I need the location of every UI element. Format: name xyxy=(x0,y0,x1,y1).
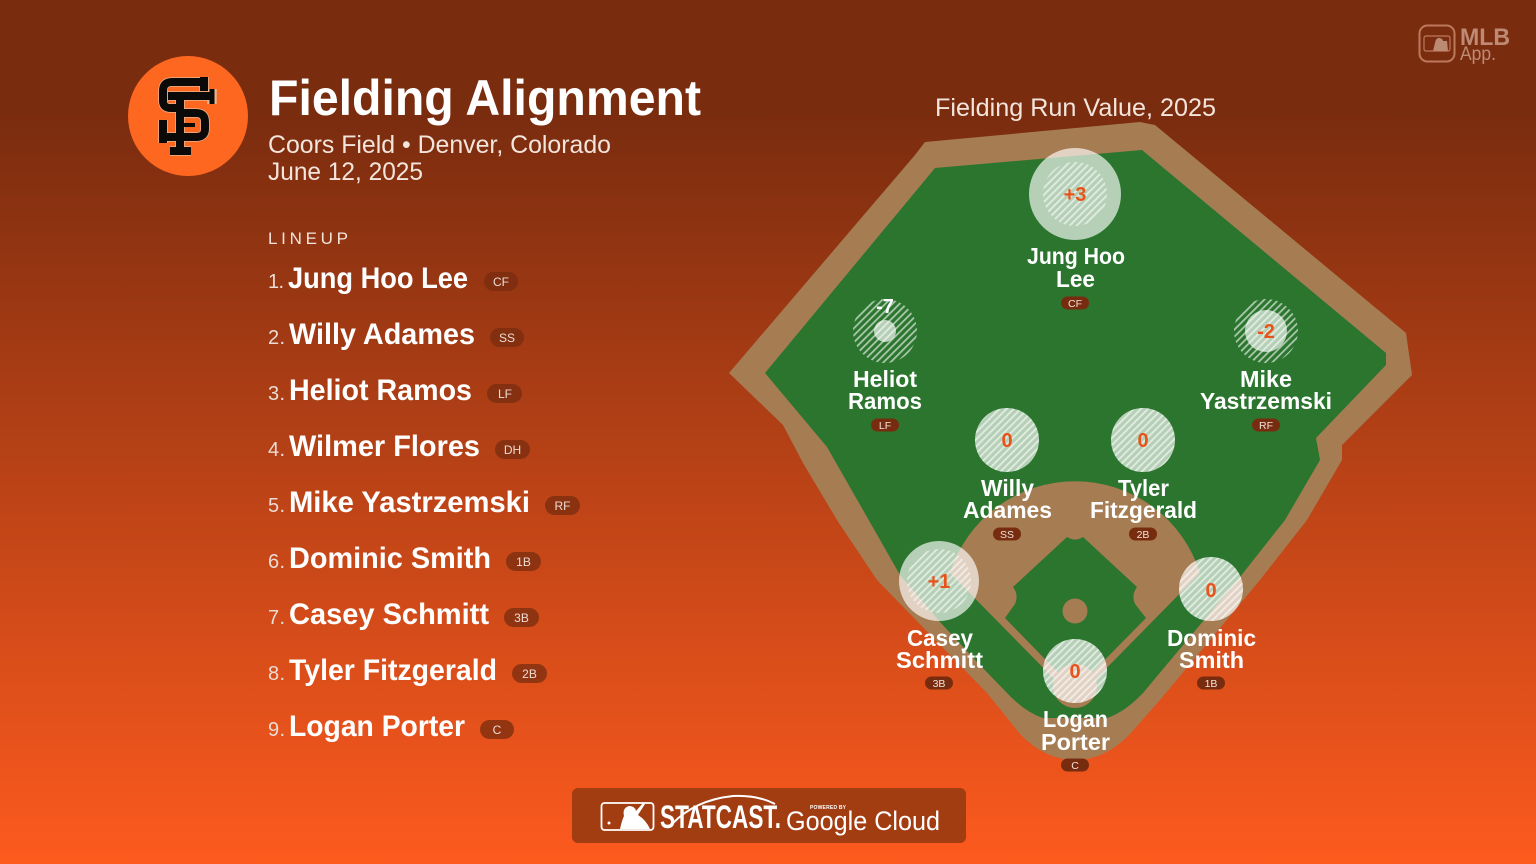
team logo: San Francisco Giants xyxy=(128,56,248,176)
warning track xyxy=(729,122,1412,760)
player: Tyler Fitzgerald: 0 xyxy=(1137,430,1149,452)
lineup row 7: Casey Schmitt xyxy=(289,598,489,631)
player: Mike Yastrzemski: Mike xyxy=(1240,366,1292,392)
player: Willy Adames xyxy=(963,408,1052,541)
lineup row 1: CF xyxy=(493,275,509,289)
powered by label: POWERED BY xyxy=(810,805,847,811)
player: Logan Porter: Logan xyxy=(1043,706,1108,732)
lineup row 1: Jung Hoo Lee xyxy=(288,262,468,295)
player: Mike Yastrzemski: -2 xyxy=(1257,321,1275,343)
player: Heliot Ramos: -7 xyxy=(876,296,894,318)
player: Logan Porter: 0 xyxy=(1069,661,1081,683)
lineup row 4: Wilmer Flores xyxy=(289,430,480,463)
lineup row 6: Dominic Smith xyxy=(289,542,491,575)
player: Logan Porter xyxy=(1041,639,1110,772)
player: Dominic Smith: Smith xyxy=(1179,647,1244,673)
player: Willy Adames: Adames xyxy=(963,497,1052,523)
player: Jung Hoo Lee xyxy=(1027,148,1125,310)
lineup row 4: DH xyxy=(504,443,521,457)
sponsor banner xyxy=(572,788,966,843)
lineup row 5: 5. xyxy=(268,495,285,517)
player: Heliot Ramos: Heliot xyxy=(853,366,917,392)
player: Willy Adames: 0 xyxy=(1001,430,1013,452)
player: Heliot Ramos: LF xyxy=(879,420,891,432)
infield dirt and foul lines xyxy=(950,481,1200,700)
player: Tyler Fitzgerald: 2B xyxy=(1137,529,1149,541)
statcast wordmark: STATCAST. xyxy=(660,799,781,835)
lineup row 3: Heliot Ramos xyxy=(289,374,472,407)
player: Willy Adames: SS xyxy=(1000,529,1014,541)
player: Dominic Smith: 1B xyxy=(1205,678,1217,690)
statcast wordmark xyxy=(660,796,781,835)
baseball field diagram xyxy=(729,122,1412,760)
lineup row 1: 1. xyxy=(268,271,284,293)
icon: MLB App logo xyxy=(1420,24,1510,65)
player: Jung Hoo Lee: Jung Hoo xyxy=(1027,243,1125,269)
lineup row 3: 3. xyxy=(268,383,285,405)
subtitle: date: June 12, 2025 xyxy=(268,158,423,186)
lineup row 7: 3B xyxy=(514,611,529,625)
pitcher's mound xyxy=(1062,598,1088,624)
player: Casey Schmitt: 3B xyxy=(933,678,945,690)
player: Dominic Smith xyxy=(1167,557,1256,690)
icon: MLB App logo: MLB xyxy=(1460,24,1510,51)
player: Casey Schmitt: Schmitt xyxy=(896,647,983,673)
player: Logan Porter: Porter xyxy=(1041,729,1110,755)
player: Mike Yastrzemski: RF xyxy=(1259,420,1273,432)
lineup row 5: RF xyxy=(554,499,570,513)
player: Dominic Smith: Dominic xyxy=(1167,625,1256,651)
lineup row 7: 7. xyxy=(268,607,285,629)
lineup row 5: Mike Yastrzemski xyxy=(289,486,530,519)
player: Heliot Ramos: Ramos xyxy=(848,388,922,414)
lineup row 6: 1B xyxy=(516,555,531,569)
lineup row 2: Willy Adames xyxy=(289,318,475,351)
lineup row 9: Logan Porter xyxy=(289,710,465,743)
lineup row 2: SS xyxy=(499,331,515,345)
lineup row 2: 2. xyxy=(268,327,285,349)
player: Tyler Fitzgerald xyxy=(1090,408,1197,541)
player: Dominic Smith: 0 xyxy=(1205,580,1217,602)
player: Tyler Fitzgerald: Tyler xyxy=(1118,475,1169,501)
lineup row 8: 8. xyxy=(268,663,285,685)
player: Tyler Fitzgerald: Fitzgerald xyxy=(1090,497,1197,523)
player: Mike Yastrzemski xyxy=(1200,299,1332,432)
icon: MLB App logo: App. xyxy=(1460,44,1496,65)
lineup row 8: Tyler Fitzgerald xyxy=(289,654,497,687)
outfield and infield grass xyxy=(765,150,1386,718)
home plate circle xyxy=(1053,664,1097,708)
lineup row 3: LF xyxy=(498,387,512,401)
player: Jung Hoo Lee: +3 xyxy=(1064,184,1086,206)
lineup row 9: C xyxy=(493,723,502,737)
player: Jung Hoo Lee: Lee xyxy=(1056,266,1095,292)
player: Mike Yastrzemski: Yastrzemski xyxy=(1200,388,1332,414)
player: Jung Hoo Lee: CF xyxy=(1068,298,1082,310)
player: Willy Adames: Willy xyxy=(981,475,1034,501)
subtitle: venue: Coors Field • Denver, Colorado xyxy=(268,131,611,159)
lineup list xyxy=(268,229,580,743)
player: Casey Schmitt: Casey xyxy=(907,625,973,651)
lineup row 9: 9. xyxy=(268,719,285,741)
lineup row 6: 6. xyxy=(268,551,285,573)
lineup heading: LINEUP xyxy=(268,229,348,248)
icon: MLB logo xyxy=(602,803,654,830)
infield grass diamond xyxy=(1005,537,1146,690)
player: Casey Schmitt xyxy=(896,541,983,690)
icon: SF monogram xyxy=(163,77,212,151)
player: Heliot Ramos xyxy=(848,296,922,432)
lineup row 4: 4. xyxy=(268,439,285,461)
lineup row 8: 2B xyxy=(522,667,537,681)
player: Logan Porter: C xyxy=(1071,760,1079,772)
title: Fielding Alignment xyxy=(269,70,701,126)
chart heading: Fielding Run Value, 2025 xyxy=(935,94,1216,122)
player: Casey Schmitt: +1 xyxy=(928,571,950,593)
google cloud wordmark: Google Cloud xyxy=(786,806,940,836)
